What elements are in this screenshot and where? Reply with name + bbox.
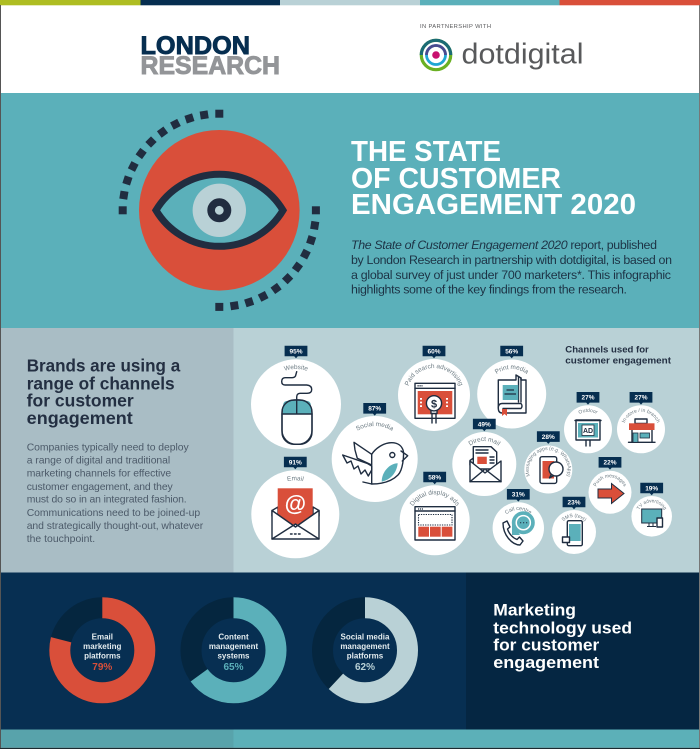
channel: website: 95% <box>289 348 303 355</box>
donut: email marketing platforms <box>60 608 145 693</box>
intro text: highlights some of the key findings from the research. <box>351 282 627 296</box>
footer band <box>0 730 700 749</box>
panel: channels chart <box>234 328 699 572</box>
chart heading: customer engagement <box>565 354 671 366</box>
intro text: a global survey of just under 700 marketers*. This infographic <box>351 268 671 282</box>
heading: brands: engagement <box>27 408 133 428</box>
channel: TV advertising: TV advertising <box>636 499 666 510</box>
body text <box>27 443 204 545</box>
channel: email: Email <box>287 476 304 482</box>
channel: call centre: Call centre <box>505 506 532 514</box>
channel: digital display ads <box>400 472 470 556</box>
channel: paid search advertising: 60% <box>427 348 441 355</box>
title: THE STATE <box>351 136 501 168</box>
donut: email marketing platforms: 79% <box>92 662 112 673</box>
chart heading: Channels used for <box>565 344 649 354</box>
donut: content management systems: systems <box>217 652 250 660</box>
channel: direct mail: Direct mail <box>468 436 501 446</box>
channel: in-store <box>617 392 665 454</box>
donut: content management systems: Content <box>218 632 249 642</box>
channel: SMS: 23% <box>567 499 581 506</box>
body text: customer engagement, and they <box>27 482 173 493</box>
intro text: The State of Customer Engagement 2020 report, published <box>351 238 657 252</box>
channel: email: 91% <box>289 459 302 466</box>
channel: social media: 87% <box>368 406 381 413</box>
body text: Companies typically need to deploy <box>27 443 189 454</box>
channel: TV advertising <box>631 482 672 537</box>
heading: marketing technology: engagement <box>493 653 599 672</box>
channel: call centre <box>492 489 544 554</box>
channel: push messages: Push messages <box>593 474 626 486</box>
channel: push messages: 22% <box>603 460 617 467</box>
donut: social media management platforms <box>322 608 408 693</box>
icon: eye in red circle <box>119 110 320 311</box>
logo: dotdigital <box>421 38 584 70</box>
chart heading <box>565 344 671 366</box>
body text: Communications need to be joined-up <box>27 508 200 519</box>
heading: brands <box>27 356 180 428</box>
channel: messaging apps: Messaging apps (e.g. WhatsApp) <box>526 446 572 476</box>
channel: SMS <box>552 496 596 554</box>
panel: hero <box>0 93 700 328</box>
title <box>351 136 636 221</box>
body text: a range of digital and traditional <box>27 456 170 467</box>
panel: channels intro <box>0 328 234 572</box>
channel: digital display ads: Digital display ads <box>410 490 459 506</box>
heading: marketing technology <box>493 600 632 672</box>
channel: messaging apps: 28% <box>542 434 555 441</box>
donut: social media management platforms: 62% <box>355 662 375 673</box>
channel: print media: Print media <box>494 365 528 374</box>
donut: social media management platforms: platforms <box>347 652 384 660</box>
channel: call centre: 31% <box>512 492 525 499</box>
donut: content management systems <box>191 608 276 693</box>
intro text <box>351 238 672 296</box>
donut: content management systems: 65% <box>223 662 244 673</box>
channel: paid search advertising <box>398 346 470 431</box>
heading: brands: for customer <box>27 391 134 411</box>
body text: and strategically thought-out, whatever <box>27 521 204 532</box>
donut: social media management platforms: management <box>340 642 390 651</box>
channel: print media <box>477 346 546 428</box>
heading: marketing technology: Marketing <box>493 600 576 619</box>
panel: marketing technology <box>0 572 700 730</box>
channel: in-store: In-store / in branch <box>622 408 660 423</box>
channel: TV advertising: 19% <box>645 485 658 492</box>
donut: email marketing platforms: marketing <box>83 642 122 651</box>
body text: must do so in an integrated fashion. <box>27 495 187 506</box>
logo ring icon <box>421 40 451 70</box>
channel: social media: Social media <box>356 422 393 431</box>
colour strip <box>0 0 700 5</box>
channel: website <box>251 346 341 450</box>
channel: outdoor: 27% <box>581 395 595 402</box>
channel: website: Website <box>284 364 308 370</box>
title: OF CUSTOMER <box>351 163 561 195</box>
channel: paid search advertising: Paid search advertising <box>404 364 462 386</box>
donut: social media management platforms: Social media <box>341 632 390 642</box>
title: ENGAGEMENT 2020 <box>351 189 636 221</box>
channel: push messages <box>588 457 632 514</box>
channel: outdoor <box>564 392 612 454</box>
channel: in-store: 27% <box>634 395 648 402</box>
intro text: by London Research in partnership with dotdigital, is based on <box>351 253 672 267</box>
heading: marketing technology: technology used <box>493 618 632 637</box>
channel: email <box>251 456 340 558</box>
body text: marketing channels for effective <box>27 469 171 480</box>
donut: email marketing platforms: Email <box>92 632 113 642</box>
channel: SMS: SMS (text) <box>562 514 586 522</box>
donut: content management systems: management <box>209 642 259 651</box>
channel: paid search advertising: $ <box>431 398 437 410</box>
channel: digital display ads: 58% <box>428 474 441 481</box>
channel: print media: 56% <box>505 348 518 355</box>
channel: outdoor: AD <box>583 428 593 435</box>
channel: messaging apps <box>524 431 572 494</box>
channel: direct mail: 49% <box>478 421 491 428</box>
donut: email marketing platforms: platforms <box>84 652 121 660</box>
heading: brands: range of channels <box>27 373 175 393</box>
logo: London Research: LONDON <box>140 32 250 60</box>
logo: London Research <box>140 32 280 80</box>
channel: social media <box>332 403 418 502</box>
heading: brands: Brands are using a <box>27 356 180 376</box>
heading: marketing technology: for customer <box>493 635 600 654</box>
body text: the touchpoint. <box>27 534 95 545</box>
logo wordmark: dotdigital <box>462 38 584 70</box>
channel: email: @ <box>285 491 306 516</box>
channel: direct mail <box>452 418 516 496</box>
partnership label: IN PARTNERSHIP WITH <box>420 24 491 30</box>
channel: outdoor: Outdoor <box>578 408 598 414</box>
logo: London Research: RESEARCH <box>140 52 280 80</box>
